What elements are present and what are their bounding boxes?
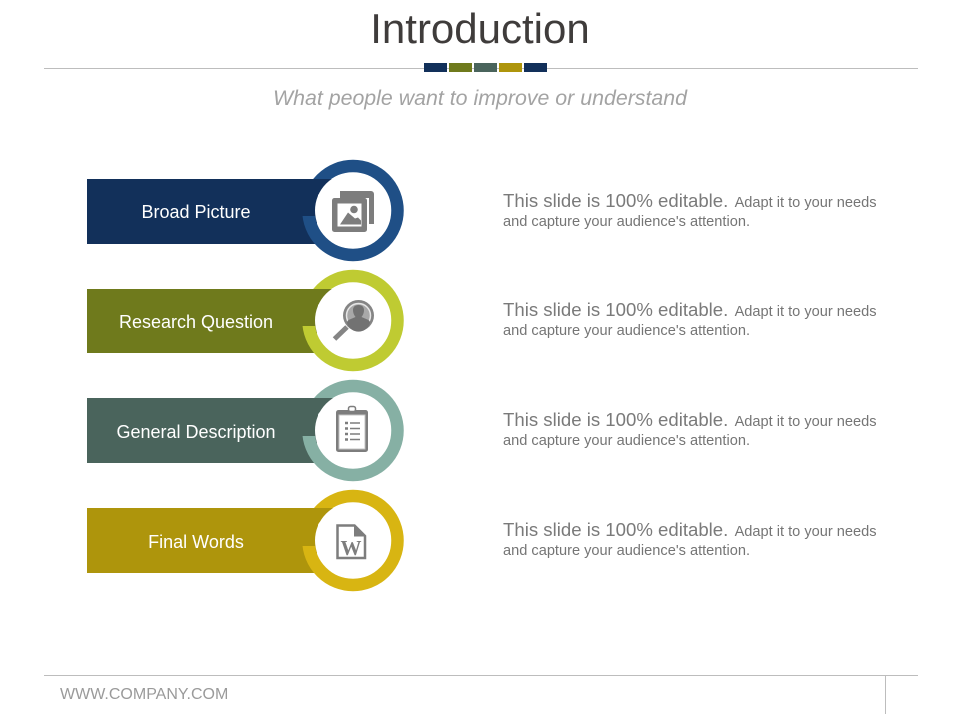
- text block 4: [503, 519, 877, 559]
- text block 3: This slide is 100% editable. Adapt it to your needs: [503, 409, 877, 430]
- icon: clipboard: [336, 406, 368, 452]
- text block 2: and capture your audience's attention.: [503, 323, 750, 339]
- text block 2: [503, 299, 877, 339]
- text block 1: [503, 190, 877, 230]
- banner: Broad Picture: [87, 166, 398, 255]
- footer text: WWW.COMPANY.COM: [60, 686, 228, 703]
- text block 3: and capture your audience's attention.: [503, 433, 750, 449]
- banner: General Description: [87, 386, 398, 475]
- icon: pictures: [332, 191, 374, 232]
- icon: word document: [338, 526, 365, 560]
- text block 1: This slide is 100% editable. Adapt it to your needs: [503, 190, 877, 211]
- colour swatches: [424, 63, 547, 72]
- label: Final Words: Final Words: [148, 532, 244, 552]
- text block 3: [503, 409, 877, 449]
- title: Introduction: [370, 5, 590, 52]
- label: Research Question: Research Question: [119, 312, 273, 332]
- header rule: [44, 68, 918, 69]
- text block 4: and capture your audience's attention.: [503, 543, 750, 559]
- footer divider: [885, 675, 886, 714]
- icon: magnifier with person: [334, 300, 374, 339]
- label: Broad Picture: Broad Picture: [141, 202, 251, 222]
- text block 1: and capture your audience's attention.: [503, 214, 750, 230]
- banner: Final Words: [87, 496, 398, 585]
- footer rule: [44, 675, 918, 676]
- text block 2: This slide is 100% editable. Adapt it to your needs: [503, 299, 877, 320]
- label: General Description: General Description: [116, 422, 276, 442]
- banner: Research Question: [87, 276, 398, 365]
- text block 4: This slide is 100% editable. Adapt it to your needs: [503, 519, 877, 540]
- subtitle: What people want to improve or understand: [273, 86, 687, 110]
- icon: word document: W: [340, 536, 362, 560]
